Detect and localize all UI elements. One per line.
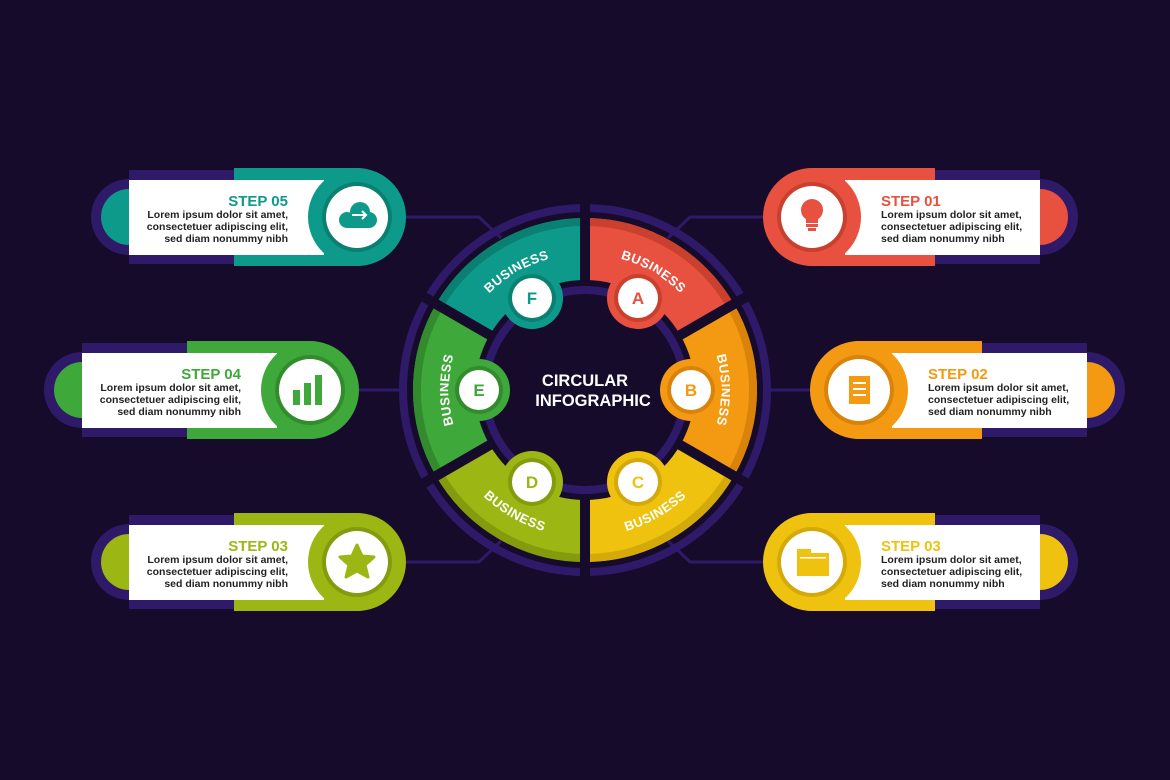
panel: step 01: Lorem ipsum dolor sit amet, xyxy=(881,209,1022,221)
segment B xyxy=(680,304,757,476)
badge F xyxy=(501,267,563,329)
center title: INFOGRAPHIC xyxy=(535,392,651,410)
badge D xyxy=(501,451,563,513)
panel: step 05: consectetuer adipiscing elit, xyxy=(147,221,288,233)
center title xyxy=(535,372,651,410)
panel: step 03 left: consectetuer adipiscing elit, xyxy=(147,566,288,578)
circular diagram: BUSINESS xyxy=(484,490,545,530)
badge A xyxy=(607,267,669,329)
panel: step 04: sed diam nonummy nibh xyxy=(117,406,241,418)
panel: step 05: Lorem ipsum dolor sit amet, xyxy=(147,209,288,221)
panel: step 02: sed diam nonummy nibh xyxy=(928,406,1052,418)
connector lines xyxy=(358,217,811,562)
icon: folder xyxy=(797,549,829,576)
panel: step 04: STEP 04 xyxy=(181,366,242,383)
circular diagram: BUSINESS xyxy=(484,251,548,293)
panel: step 01: sed diam nonummy nibh xyxy=(881,233,1005,245)
panel: step 01: consectetuer adipiscing elit, xyxy=(881,221,1022,233)
panel: step 01: STEP 01 xyxy=(881,193,941,210)
segment C xyxy=(585,445,734,562)
panel: step 03 left: Lorem ipsum dolor sit amet, xyxy=(147,554,288,566)
panel: step 05: STEP 05 xyxy=(228,193,288,210)
panel: step 02: Lorem ipsum dolor sit amet, xyxy=(928,382,1069,394)
panel: step 02: consectetuer adipiscing elit, xyxy=(928,394,1069,406)
icon: cloud xyxy=(339,202,377,228)
panel: step 03 left: STEP 03 xyxy=(228,538,288,555)
circular diagram: BUSINESS xyxy=(440,354,454,426)
badge A: A xyxy=(632,289,644,308)
segment D xyxy=(436,445,585,562)
badge D: D xyxy=(526,473,538,492)
panel: step 03 right: Lorem ipsum dolor sit amet, xyxy=(881,554,1022,566)
panel: step 02: STEP 02 xyxy=(928,366,988,383)
panel: step 03 right: consectetuer adipiscing elit, xyxy=(881,566,1022,578)
badge B xyxy=(660,359,722,421)
badge F: F xyxy=(527,289,537,308)
icon: lightbulb xyxy=(801,199,823,231)
panel: step 03 right: STEP 03 xyxy=(881,538,941,555)
segment E xyxy=(413,304,490,476)
center title: CIRCULAR xyxy=(542,372,628,390)
badge E: E xyxy=(473,381,485,400)
panel: step 04: consectetuer adipiscing elit, xyxy=(100,394,241,406)
panel: step 03 left: sed diam nonummy nibh xyxy=(164,578,288,590)
circular diagram xyxy=(399,204,771,576)
badge C: C xyxy=(632,473,644,492)
panel: step 01 xyxy=(763,168,1078,266)
panel: step 05: sed diam nonummy nibh xyxy=(164,233,288,245)
icon: star xyxy=(340,545,374,577)
badge E xyxy=(448,359,510,421)
circular diagram: BUSINESS xyxy=(716,354,730,426)
panel: step 03 left xyxy=(91,513,406,611)
icon: document xyxy=(849,376,870,404)
segment F xyxy=(436,218,585,335)
circular diagram: BUSINESS xyxy=(622,250,686,292)
badge B: B xyxy=(685,381,697,400)
panel: step 04 xyxy=(44,341,359,439)
segment A xyxy=(585,218,734,335)
panel: step 03 right: sed diam nonummy nibh xyxy=(881,578,1005,590)
panel: step 02 xyxy=(810,341,1125,439)
panel: step 03 right xyxy=(763,513,1078,611)
circular diagram: BUSINESS xyxy=(624,491,685,531)
panel: step 05 xyxy=(91,168,406,266)
badge C xyxy=(607,451,669,513)
icon: bar chart xyxy=(293,375,322,405)
panel: step 04: Lorem ipsum dolor sit amet, xyxy=(100,382,241,394)
